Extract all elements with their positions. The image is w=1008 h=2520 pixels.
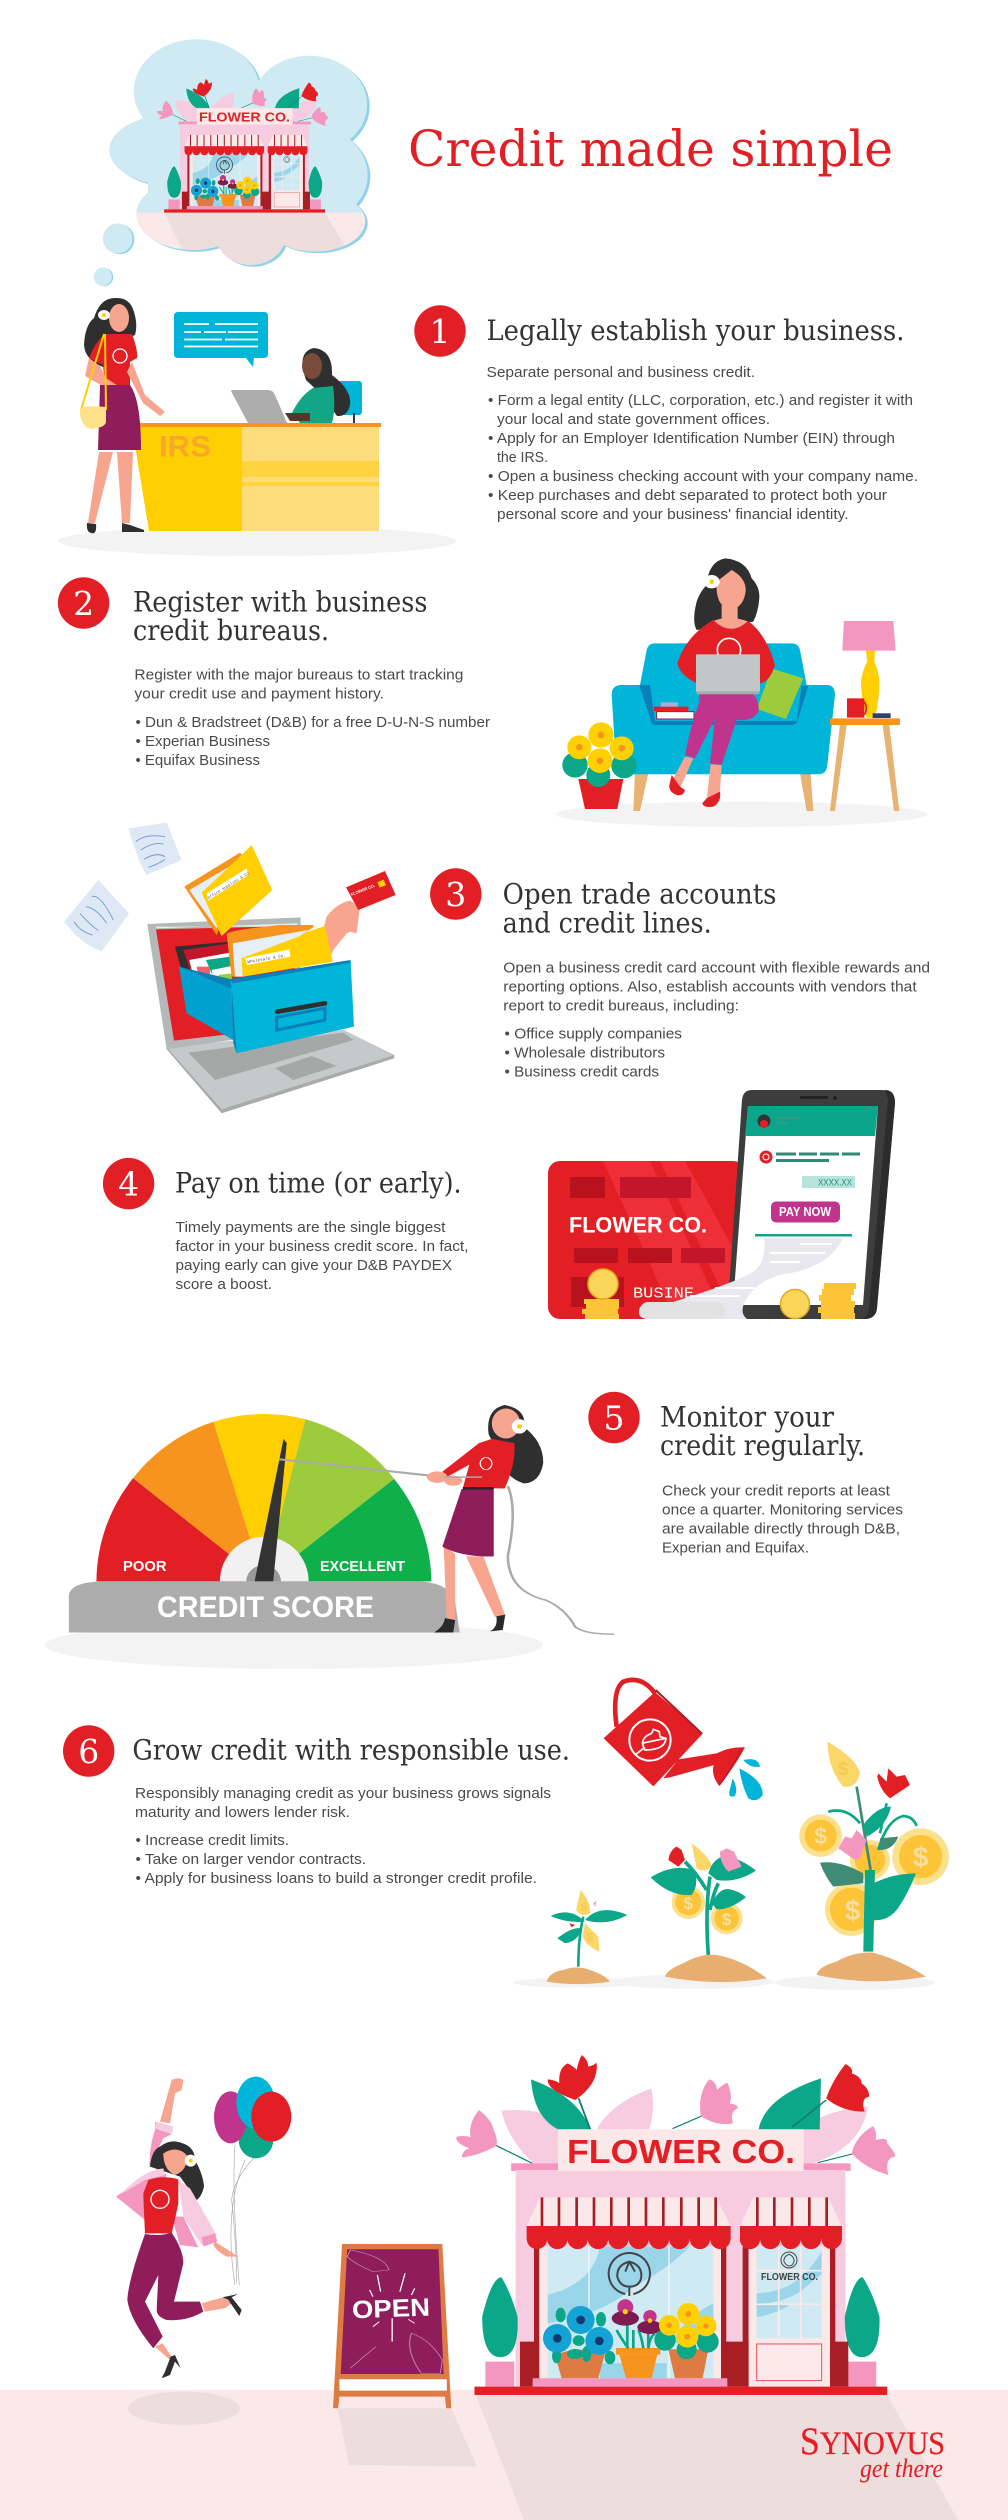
number badge: 6	[78, 1732, 99, 1771]
body text: • Form a legal entity (LLC, corporation, etc.) and register it with	[488, 392, 913, 409]
illustration: credit score gauge	[45, 1405, 614, 1669]
folder in drawer: Wholesale & Co.	[247, 954, 286, 965]
large plant: $	[814, 1823, 827, 1849]
Synovus logo	[800, 2420, 945, 2483]
body text: paying early can give your D&B PAYDEX	[176, 1257, 452, 1274]
speech bubble	[174, 312, 268, 367]
heading	[660, 1400, 865, 1462]
step 4	[103, 1158, 468, 1293]
large plant: $	[913, 1842, 929, 1873]
drawer	[179, 960, 354, 1053]
body text: • Open a business checking account with your company name.	[488, 468, 918, 485]
body text: once a quarter. Monitoring services	[662, 1502, 903, 1519]
body text: your local and state government offices.	[497, 411, 770, 428]
body text: • Business credit cards	[504, 1064, 659, 1080]
illustration: credit card and phone	[548, 1090, 895, 1319]
open sign: OPEN	[351, 2294, 430, 2324]
card name: FLOWER CO.	[569, 1212, 707, 1238]
heading: Monitor your	[660, 1400, 835, 1433]
body text: • Office supply companies	[504, 1026, 682, 1043]
number badge: 3	[445, 875, 466, 914]
small plant: $	[581, 1902, 588, 1914]
laptop	[231, 390, 287, 423]
body text: Register with the major bureaus to start tracking	[134, 667, 463, 684]
medium plant: $	[684, 1894, 694, 1913]
body text: Separate personal and business credit.	[486, 364, 755, 381]
illustration: woman at IRS desk	[58, 298, 456, 556]
body text: Experian and Equifax.	[662, 1540, 809, 1556]
laptop	[147, 917, 394, 1113]
medium plant	[651, 1843, 767, 1982]
woman with bag	[80, 298, 165, 533]
body text: report to credit bureaus, including:	[503, 998, 739, 1014]
large plant	[799, 1742, 949, 1981]
body text: • Apply for an Employer Identification Number (EIN) through	[488, 430, 895, 447]
body text: • Take on larger vendor contracts.	[136, 1851, 366, 1868]
large plant: $	[845, 1895, 861, 1926]
heading: Legally establish your business.	[486, 314, 904, 347]
small plant: $	[587, 1932, 594, 1944]
number badge	[63, 1725, 114, 1777]
arm and credit card: FLOWER CO.	[350, 883, 376, 897]
small plant	[547, 1890, 627, 1984]
body text: • Dun & Bradstreet (D&B) for a free D-U-N-S number	[136, 714, 490, 731]
number badge: 4	[118, 1165, 139, 1204]
watering can	[605, 1680, 763, 1800]
illustration: watering can and money plants	[513, 1680, 949, 1990]
body text: • Increase credit limits.	[136, 1832, 289, 1849]
body text: • Equifax Business	[136, 752, 260, 769]
number badge	[588, 1392, 640, 1443]
medium plant: $	[722, 1910, 732, 1929]
number badge: 1	[430, 312, 450, 351]
body text: Timely payments are the single biggest	[176, 1219, 446, 1236]
heading: and credit lines.	[503, 906, 712, 940]
soil shadows	[513, 1974, 935, 1990]
shadows	[128, 2392, 958, 2520]
body text: score a boost.	[176, 1276, 272, 1293]
gauge dial	[69, 1414, 460, 1632]
Synovus logo: SYNOVUS	[800, 2420, 945, 2463]
body text: personal score and your business' financial identity.	[497, 506, 848, 523]
floating papers	[64, 823, 182, 952]
flying folder: Office Supplies & Co	[207, 871, 251, 901]
phone	[727, 1090, 895, 1319]
card label: BUSINE	[633, 1286, 694, 1302]
body text	[135, 1785, 551, 1887]
body text	[486, 364, 918, 523]
illustration: woman on sofa	[556, 558, 927, 827]
receipt	[639, 1238, 843, 1319]
open sign	[333, 2244, 451, 2408]
number badge: 5	[604, 1398, 624, 1438]
footer ground band	[0, 2390, 1008, 2520]
phone: PAY NOW	[779, 1204, 832, 1219]
footer illustrations	[116, 2055, 958, 2520]
arm and credit card	[307, 871, 396, 965]
receptionist	[285, 348, 362, 423]
heading: credit bureaus.	[133, 614, 329, 647]
step 2	[58, 577, 490, 769]
illustration: credit score gauge: EXCELLENT	[320, 1558, 405, 1575]
body text	[662, 1483, 903, 1556]
step 6	[63, 1725, 570, 1887]
woman pulling needle	[427, 1405, 614, 1634]
number badge	[430, 868, 481, 920]
body text: Open a business credit card account with flexible rewards and	[503, 960, 930, 976]
flower shop: FLOWER CO.	[567, 2133, 795, 2170]
step 5	[588, 1392, 903, 1556]
phone: XXXX.XX	[818, 1178, 852, 1188]
flower shop	[456, 2055, 895, 2395]
illustration: laptop and file drawer	[64, 823, 396, 1113]
body text: your credit use and payment history.	[134, 686, 384, 703]
folder in drawer	[227, 925, 333, 977]
body text: • Experian Business	[136, 733, 270, 750]
IRS label: IRS	[159, 430, 211, 464]
credit card	[548, 1161, 745, 1319]
body text: • Wholesale distributors	[504, 1044, 665, 1062]
number badge	[58, 577, 109, 629]
body text: reporting options. Also, establish accounts with vendors that	[503, 978, 918, 996]
large plant: $	[838, 1759, 849, 1780]
title: Credit made simple	[408, 120, 893, 178]
step 1	[414, 305, 918, 523]
desk	[132, 423, 381, 531]
illustration: thought cloud with flower shop	[94, 32, 386, 286]
body text	[134, 667, 490, 769]
dial labels: POOR	[123, 1558, 167, 1575]
coins	[582, 1269, 856, 1319]
Synovus logo: get there	[860, 2454, 943, 2483]
jumping woman with balloons	[116, 2077, 291, 2378]
number badge	[103, 1158, 154, 1209]
body text	[176, 1219, 468, 1293]
flying folder	[184, 845, 272, 936]
files in drawer	[175, 942, 232, 983]
desk shadow	[58, 526, 456, 556]
heading: Pay on time (or early).	[175, 1166, 462, 1200]
heading	[133, 585, 428, 647]
heading: Open trade accounts	[503, 878, 776, 911]
base label: CREDIT SCORE	[157, 1591, 374, 1624]
heading	[503, 878, 776, 940]
body text: • Keep purchases and debt separated to protect both your	[488, 487, 887, 504]
body text: Responsibly managing credit as your business grows signals	[135, 1785, 551, 1802]
body text: are available directly through D&B,	[662, 1520, 900, 1538]
body text: the IRS.	[497, 449, 548, 466]
heading: Register with business	[133, 585, 428, 618]
body text	[503, 960, 930, 1080]
number badge	[414, 305, 466, 357]
mini flower shop	[157, 79, 328, 213]
body text: factor in your business credit score. In fact,	[176, 1238, 468, 1255]
flower shop: FLOWER CO.	[761, 2272, 818, 2283]
mini flower shop: FLOWER CO.	[199, 110, 290, 124]
body text: maturity and lowers lender risk.	[135, 1804, 350, 1821]
body text: Check your credit reports at least	[662, 1483, 891, 1500]
heading: Grow credit with responsible use.	[132, 1733, 570, 1766]
number badge: 2	[73, 584, 94, 623]
step 3	[430, 868, 930, 1080]
gauge shadow	[45, 1621, 543, 1669]
body text: • Apply for business loans to build a stronger credit profile.	[136, 1870, 537, 1887]
heading: credit regularly.	[660, 1429, 865, 1462]
